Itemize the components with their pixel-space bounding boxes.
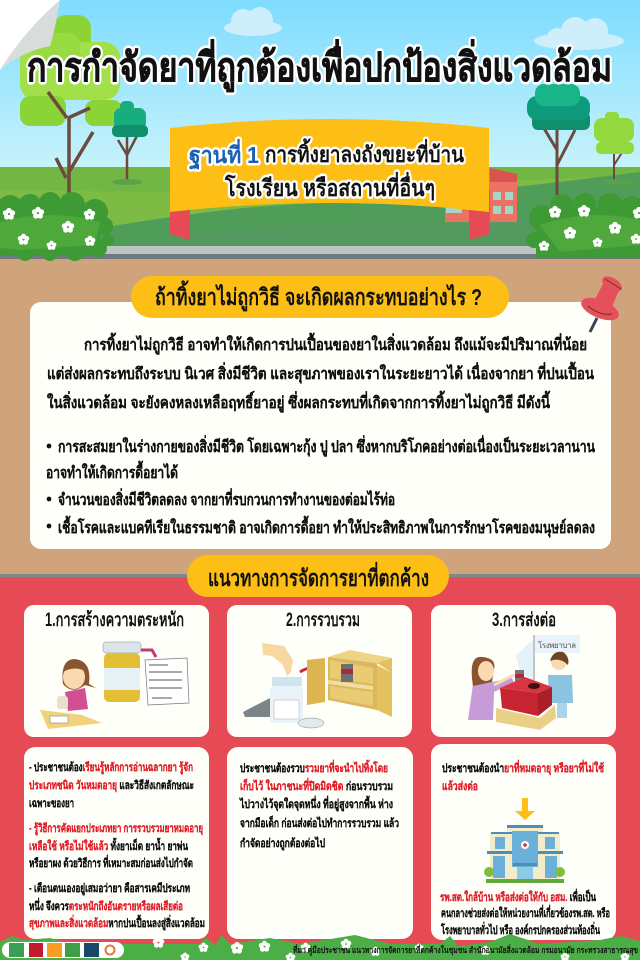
paragraph: [47, 332, 594, 414]
heading pill: impacts: [131, 276, 509, 318]
banner ribbon: [170, 119, 489, 212]
icon: hospital: [484, 825, 565, 883]
bullet list: [46, 435, 595, 538]
heading pill: impacts: ถ้าทิ้งยาไม่ถูกวิธี จะเกิดผลกระทบอย่างไร ?: [155, 280, 482, 312]
illustration: drop box: โรงพยาบาล: [538, 640, 576, 650]
banner tails: [170, 208, 489, 240]
SDG badge strip: [2, 942, 124, 958]
tree: right teal: [527, 84, 590, 195]
panel: card 3 details: [431, 744, 616, 940]
collection text: เก็บไว้ ในภาชนะที่ปิดมิดชิด ก่อนรวบรวม: [240, 777, 393, 793]
collection text: กำจัดอย่างถูกต้องต่อไป: [240, 836, 325, 851]
banner: station 1: [170, 119, 489, 240]
collection text: จากมือเด็ก ก่อนส่งต่อไปทำการรวบรวม แล้ว: [240, 815, 399, 830]
paragraph: ในสิ่งแวดล้อม จะยังคงหลงเหลือฤทธิ์ยาอยู่ ซึ่งผลกระทบที่เกิดจากการทิ้งยาไม่ถูกวิธี มีดังนี้: [47, 390, 550, 414]
awareness text: - รู้วิธีการคัดแยกประเภทยา การรวบรวมยาหมดอายุ: [29, 822, 203, 836]
forwarding text top: แล้วส่งต่อ: [442, 780, 478, 793]
tree: small left: [112, 101, 148, 185]
panel: card 1 awareness: [24, 605, 209, 737]
forwarding text bottom: รพ.สต.ใกล้บ้าน หรือส่งต่อให้กับ อสม. เพื่อเป็น: [440, 888, 596, 904]
cloud right: [534, 17, 624, 50]
awareness text: สุขภาพและสิ่งแวดล้อมหากปนเปื้อนลงสู่สิ่งแวดล้อม: [29, 914, 205, 931]
bullet list: อาจทำให้เกิดการดื้อยาได้: [46, 460, 178, 482]
illustration: drop box: [468, 635, 580, 730]
heading pill: management: แนวทางการจัดการยาที่ตกค้าง: [208, 561, 429, 591]
school building: [445, 168, 517, 222]
bush right: [526, 193, 640, 258]
awareness text: หนึ่ง จึงควรตระหนักถึงอันตรายหรือผลเสียต่อ: [29, 897, 183, 913]
forwarding text top: [442, 759, 604, 793]
forwarding text bottom: [440, 888, 610, 937]
collection text: [238, 759, 399, 851]
illustration: jar and cabinet: [243, 643, 392, 728]
bullet list: จำนวนของสิ่งมีชีวิตลดลง จากยาที่รบกวนการทำงานของต่อมไร้ท่อ: [58, 488, 395, 509]
panel: card 3 forwarding: [431, 605, 616, 737]
arrow down: [515, 798, 535, 820]
awareness text: - เตือนตนเองอยู่เสมอว่ายา คือสารเคมีประเภท: [29, 882, 190, 896]
awareness text: เฉพาะของยา: [29, 798, 74, 810]
panel: impacts: [30, 273, 625, 549]
card 1 heading: 1.การสร้างความตระหนัก: [45, 609, 184, 631]
pushpin icon: [578, 273, 625, 332]
road: [0, 246, 640, 259]
awareness text: [29, 761, 205, 931]
tree: large left: [20, 15, 122, 200]
awareness text: ประเภทชนิด วันหมดอายุ และวิธีสังเกตลักษณะ: [29, 779, 194, 793]
banner text: [189, 138, 464, 201]
panel: card 1 details: [24, 747, 209, 939]
collection text: ประชาชนต้องรวบรวมยาที่จะนำไปทิ้งโดย: [240, 759, 388, 775]
cloud left: [224, 7, 282, 36]
awareness text: หรือยาผง ด้วยวิธีการ ที่เหมาะสมก่อนส่งไปกำจัด: [29, 854, 193, 870]
collection text: ไปวางไว้จุดใดจุดหนึ่ง ที่อยู่สูงจากพื้น ห่าง: [238, 795, 393, 812]
card 3 heading: 3.การส่งต่อ: [492, 610, 556, 631]
brown ground: [0, 259, 640, 575]
awareness text: - ประชาชนต้องเรียนรู้หลักการอ่านฉลากยา รู้จัก: [29, 761, 193, 775]
card 2 heading: 2.การรวบรวม: [286, 610, 360, 631]
grass fields: [0, 167, 640, 249]
tree: right light: [594, 112, 635, 185]
footer band: [0, 934, 640, 960]
heading pill: management: [187, 555, 449, 597]
banner text: โรงเรียน หรือสถานที่อื่นๆ: [224, 171, 435, 201]
banner text: ฐานที่ 1: [189, 138, 259, 170]
bush left: [0, 192, 114, 261]
panel: card 2 details: [227, 747, 413, 939]
forwarding text top: ประชาชนต้องนำยาที่หมดอายุ หรือยาที่ไม่ใช้: [442, 759, 604, 776]
awareness text: เหลือใช้ หรือไม่ใช้แล้ว ทั้งยาเม็ด ยาน้ำ ยาพ่น: [29, 837, 188, 853]
banner text: การทิ้งยาลงถังขยะที่บ้าน: [265, 138, 464, 167]
page curl: [0, 0, 60, 70]
red ground: [0, 574, 640, 960]
illustration: woman reading label: [40, 642, 189, 729]
panel: card 2 collection: [227, 605, 412, 737]
